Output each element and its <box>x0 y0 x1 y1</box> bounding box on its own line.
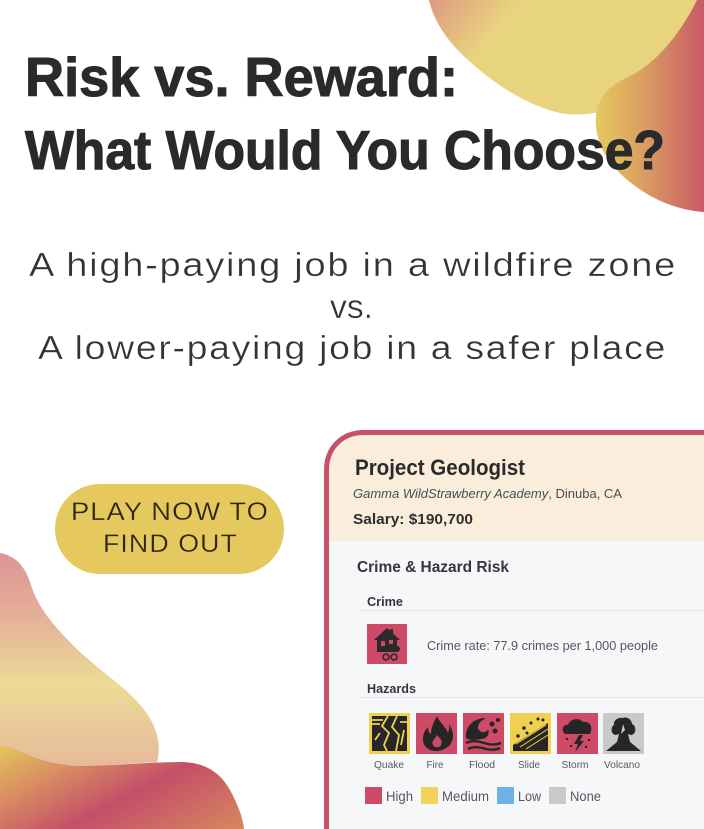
title <box>25 46 665 181</box>
subtitle text: A lower-paying job in a safer place <box>38 329 667 366</box>
hazards heading: Hazards <box>367 681 416 696</box>
play now button <box>55 484 284 574</box>
card header <box>327 433 704 541</box>
employer and location: Gamma WildStrawberry Academy, Dinuba, CA <box>353 486 622 501</box>
icon: crime house <box>367 624 407 664</box>
icon: volcano <box>603 713 644 754</box>
icon: quake <box>369 713 410 754</box>
decorative blob: bottom left peach <box>0 553 159 767</box>
subtitle text: vs. <box>330 288 373 325</box>
hazard labels: Fire <box>426 759 444 771</box>
decorative blob: top right red <box>596 0 704 212</box>
icon: slide <box>510 713 551 754</box>
decorative blob: bottom left red <box>0 746 244 829</box>
play now button: FIND OUT <box>103 530 238 558</box>
icon: flood <box>463 713 504 754</box>
subtitle text: A high-paying job in a wildfire zone <box>29 246 677 283</box>
legend <box>365 787 601 804</box>
hazard labels: Quake <box>374 759 404 771</box>
legend: High <box>386 788 413 804</box>
section heading: Crime & Hazard Risk <box>357 559 509 576</box>
icon: storm <box>557 713 598 754</box>
subtitle text <box>29 246 677 366</box>
decorative blob: top right yellow <box>429 0 697 115</box>
crime heading: Crime <box>367 594 403 609</box>
salary: Salary: $190,700 <box>353 511 473 528</box>
hazard labels <box>374 759 640 771</box>
title: What Would You Choose? <box>25 119 665 181</box>
crime rate text: Crime rate: 77.9 crimes per 1,000 people <box>427 638 658 653</box>
hazard labels: Slide <box>518 759 540 771</box>
hazard labels: Volcano <box>604 759 640 771</box>
panel: job card <box>326 432 704 829</box>
legend: None <box>570 788 601 804</box>
title: Risk vs. Reward: <box>25 46 458 108</box>
legend: Medium <box>442 788 489 804</box>
hazard labels: Storm <box>562 759 589 771</box>
icon: fire <box>416 713 457 754</box>
hazard labels: Flood <box>469 759 495 771</box>
legend: Low <box>518 788 542 804</box>
job title: Project Geologist <box>355 455 526 480</box>
play now button: PLAY NOW TO <box>71 498 269 526</box>
